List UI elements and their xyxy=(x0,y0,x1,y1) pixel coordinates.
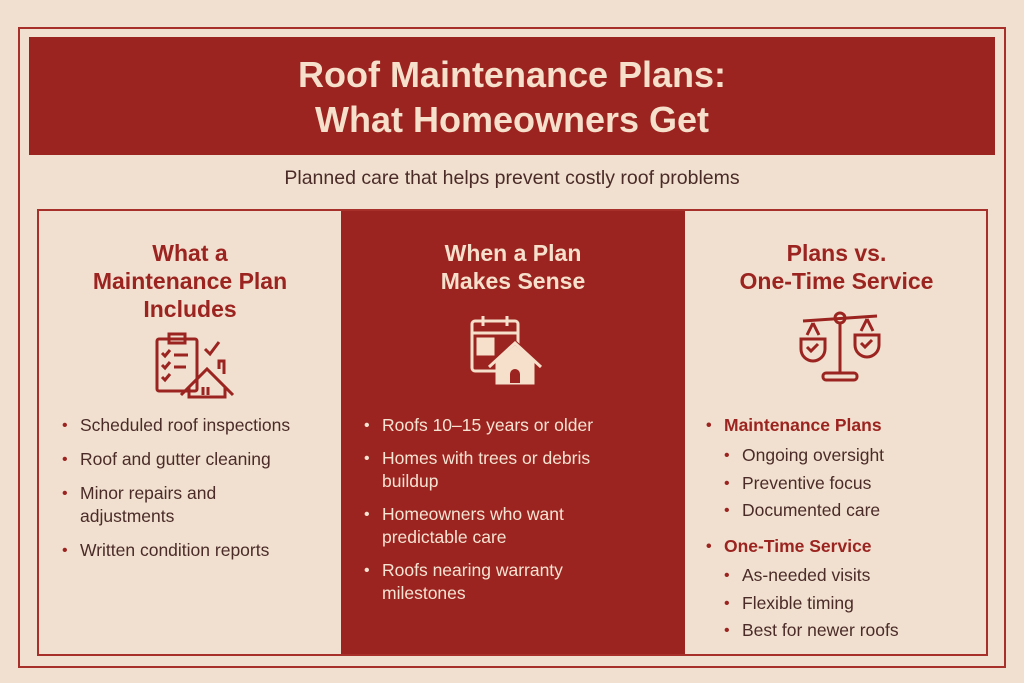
list: when: Homeowners who want predictable care xyxy=(382,504,564,547)
heading: compare: Plans vs. xyxy=(787,240,886,266)
list: includes: Roof and gutter cleaning xyxy=(80,449,271,469)
list: compare: Flexible timing xyxy=(742,592,854,612)
list: compare: Maintenance Plans xyxy=(724,415,882,435)
list: compare: Documented care xyxy=(742,500,880,520)
title banner: Roof Maintenance Plans: xyxy=(298,54,726,95)
list: compare: As-needed visits xyxy=(742,565,870,585)
heading: when: Makes Sense xyxy=(441,268,585,294)
heading: includes: Maintenance Plan xyxy=(93,268,287,294)
title banner: What Homeowners Get xyxy=(315,99,709,140)
heading: compare: One-Time Service xyxy=(740,268,933,294)
panel: when a plan makes sense xyxy=(341,211,685,654)
list: when: Homes with trees or debris buildup xyxy=(382,448,590,491)
list: when xyxy=(364,415,593,603)
icon: clipboard house xyxy=(156,332,234,398)
heading: when xyxy=(441,240,585,294)
list: includes xyxy=(62,415,290,560)
list: compare: Ongoing oversight xyxy=(742,445,884,465)
heading: when: When a Plan xyxy=(445,240,581,266)
list: compare: Best for newer roofs xyxy=(742,620,899,640)
heading: includes xyxy=(93,240,287,322)
list: compare: One-Time Service xyxy=(724,536,872,556)
heading: includes: What a xyxy=(152,240,228,266)
panel: plans vs one-time xyxy=(706,240,933,640)
icon: scales xyxy=(800,312,880,382)
list: compare xyxy=(706,415,899,640)
subtitle: Planned care that helps prevent costly roof problems xyxy=(284,167,740,189)
list: includes: Written condition reports xyxy=(80,540,269,560)
list: when: Roofs 10–15 years or older xyxy=(382,415,593,435)
list: compare: Preventive focus xyxy=(742,472,871,492)
list: includes: Scheduled roof inspections xyxy=(80,415,290,435)
title banner xyxy=(29,37,995,155)
heading: includes: Includes xyxy=(143,296,237,322)
heading: compare xyxy=(740,240,933,294)
list: when: Roofs nearing warranty milestones xyxy=(382,560,563,603)
list: includes: Minor repairs and adjustments xyxy=(80,483,216,526)
icon: calendar house xyxy=(470,316,542,384)
panels container xyxy=(37,209,988,656)
panel: what a plan includes xyxy=(62,240,290,560)
